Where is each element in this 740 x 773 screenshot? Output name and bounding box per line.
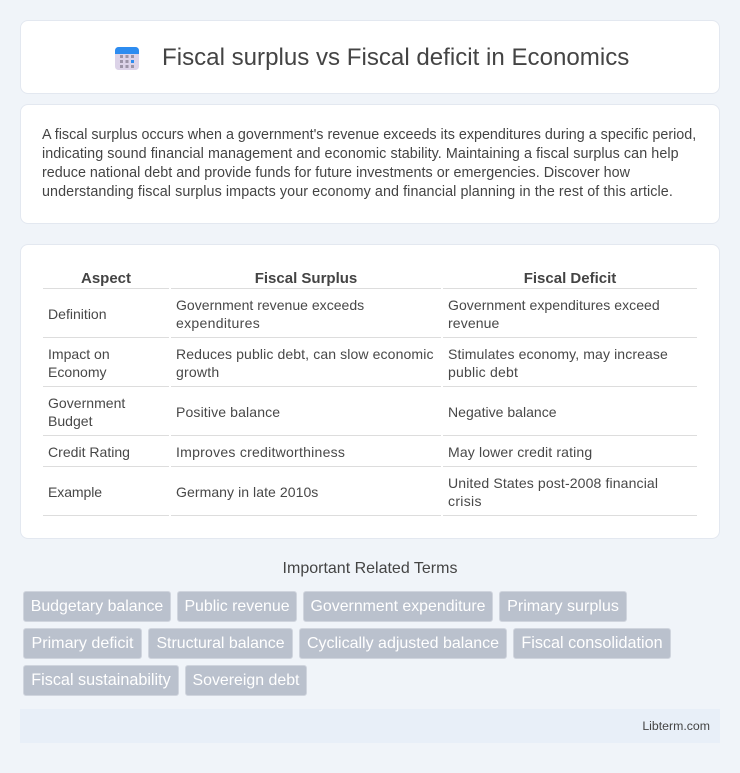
tag: Fiscal consolidation — [521, 634, 663, 652]
tag — [23, 628, 142, 659]
panel: intro text — [20, 104, 720, 224]
row: definition: expenditures — [176, 315, 260, 331]
row: example: crisis — [448, 493, 482, 509]
table header: Fiscal Deficit — [524, 270, 616, 287]
row: credit rating: Credit Rating — [48, 444, 130, 460]
tag: Sovereign debt — [193, 672, 299, 689]
comparison table — [43, 270, 697, 516]
panel: comparison table — [20, 244, 720, 539]
intro paragraph: A fiscal surplus occurs when a government's revenue exceeds its expenditures during a specific period, — [42, 127, 696, 143]
tag — [499, 591, 627, 622]
tag: Government expenditure — [311, 598, 485, 615]
row: credit rating: Improves creditworthiness — [176, 444, 345, 460]
tag — [299, 628, 507, 659]
row: impact on economy: public debt — [448, 364, 518, 380]
row: definition: Government revenue exceeds — [176, 297, 364, 313]
tag — [23, 591, 171, 622]
footer credit: Libterm.com — [642, 719, 710, 733]
row: impact on economy: Reduces public debt, can slow economic — [176, 346, 434, 362]
tag: Fiscal sustainability — [31, 671, 171, 689]
tag: Primary deficit — [32, 634, 133, 652]
table header: Fiscal Surplus — [255, 270, 357, 287]
row: impact on economy: Impact on — [48, 346, 110, 362]
row: definition: revenue — [448, 315, 499, 331]
row: government budget: Budget — [48, 413, 93, 429]
footer bar — [20, 709, 720, 743]
tag — [185, 665, 307, 696]
table header — [81, 270, 616, 287]
panel: title — [20, 20, 720, 94]
row: impact on economy: growth — [176, 364, 219, 380]
row: example: Example — [48, 484, 102, 500]
intro paragraph: reduce national debt and provide funds for future investments or emergencies. Discover how — [42, 165, 630, 181]
tag — [513, 628, 671, 659]
intro paragraph: indicating sound financial management and economic stability. Maintaining a fiscal surplus can help — [42, 146, 679, 162]
row: government budget: Positive balance — [176, 404, 280, 420]
row: example: Germany in late 2010s — [176, 484, 318, 500]
tag: Budgetary balance — [31, 598, 163, 615]
tag: Structural balance — [156, 635, 285, 652]
tag group: related terms — [23, 591, 671, 696]
row: government budget: Negative balance — [448, 404, 557, 420]
icon: calendar — [115, 47, 139, 70]
row: definition — [48, 297, 660, 331]
intro paragraph — [42, 127, 696, 200]
tag — [303, 591, 493, 622]
title text: Fiscal surplus vs Fiscal deficit in Economics — [162, 44, 629, 71]
row: credit rating — [48, 444, 592, 460]
row: definition: Government expenditures exceed — [448, 297, 660, 313]
tag: Public revenue — [184, 598, 290, 615]
row: example: United States post-2008 financial — [448, 475, 658, 491]
tag — [177, 591, 297, 622]
heading: important related terms: Important Related Terms — [283, 560, 457, 577]
row: impact on economy: Stimulates economy, may increase — [448, 346, 668, 362]
row: government budget: Government — [48, 395, 125, 411]
row: credit rating: May lower credit rating — [448, 444, 592, 460]
tag — [23, 665, 179, 696]
row: impact on economy — [48, 346, 668, 380]
row: example — [48, 475, 658, 509]
row: definition: Definition — [48, 306, 107, 322]
table header: Aspect — [81, 270, 131, 287]
tag: Cyclically adjusted balance — [307, 635, 499, 652]
tag: Primary surplus — [507, 597, 619, 615]
tag — [148, 628, 293, 659]
row: government budget — [48, 395, 557, 429]
row: impact on economy: Economy — [48, 364, 107, 380]
intro paragraph: understanding fiscal surplus impacts your economy and financial planning in the rest of this article. — [42, 184, 673, 200]
